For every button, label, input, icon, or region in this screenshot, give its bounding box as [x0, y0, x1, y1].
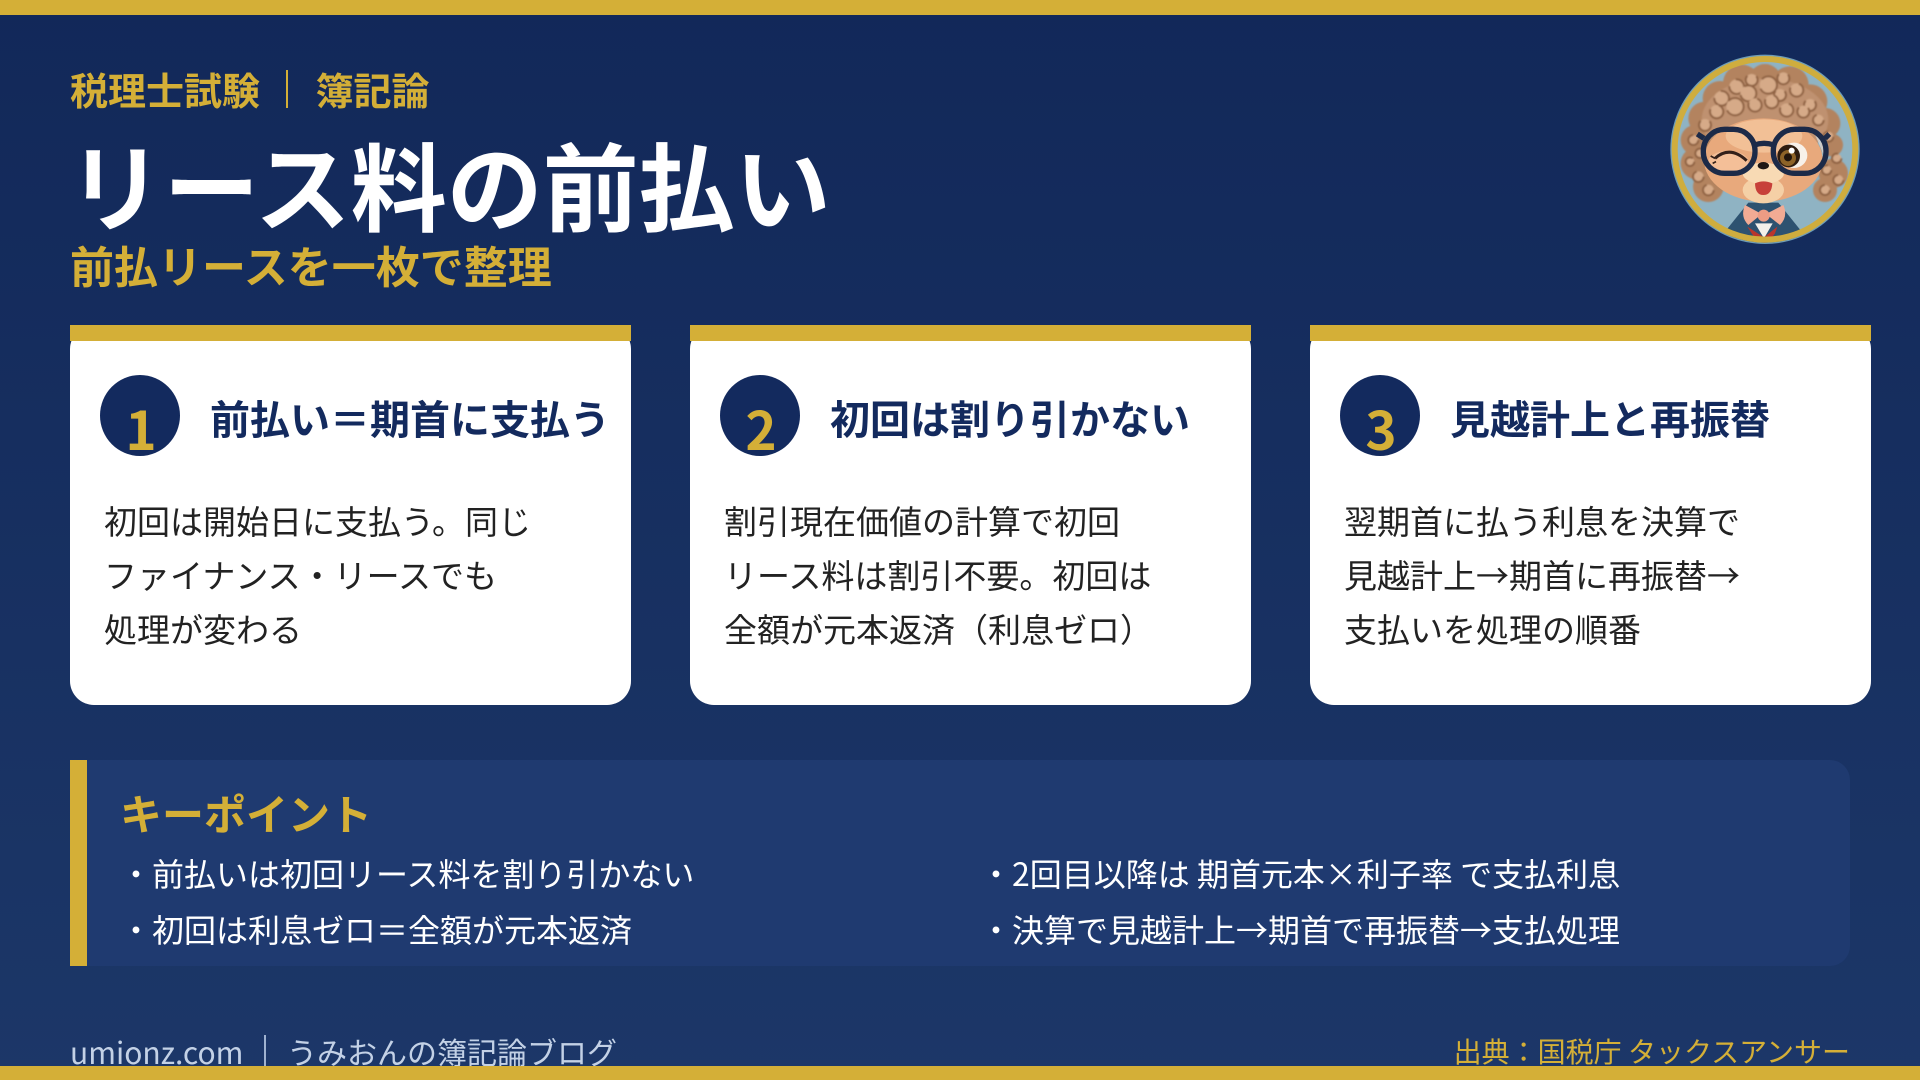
key point: right 1: ・2回目以降は 期首元本×利子率 で支払利息 [980, 850, 1620, 896]
card top accent [690, 325, 1250, 341]
top gold bar [0, 0, 1920, 15]
card body text: 割引現在価値の計算で初回 [724, 496, 1120, 544]
card body text: 見越計上→期首に再振替→ [1344, 550, 1740, 598]
bottom gold bar [0, 1066, 1920, 1080]
blog name: うみおんの簿記論ブログ [287, 1028, 617, 1072]
panel: key points [70, 760, 1850, 966]
key point: right 2: ・決算で見越計上→期首で再振替→支払処理 [980, 906, 1620, 952]
eyebrow text: subject: 簿記論 [316, 61, 430, 116]
key points accent bar [70, 760, 87, 966]
card body text: 初回は開始日に支払う。同じ [104, 496, 531, 544]
eyebrow text: exam: 税理士試験 [70, 61, 260, 116]
header eyebrow: exam and subject [70, 61, 430, 116]
card heading: 前払い＝期首に支払う [210, 388, 610, 446]
key point: left 1: ・前払いは初回リース料を割り引かない [120, 850, 694, 896]
card body text: 全額が元本返済（利息ゼロ） [724, 604, 1153, 652]
number badge 1 [100, 375, 180, 456]
number badge 2 [720, 375, 800, 456]
card body text [724, 496, 1153, 652]
subtitle: 前払リースを一枚で整理 [70, 232, 552, 296]
key point: left 2: ・初回は利息ゼロ＝全額が元本返済 [120, 906, 632, 952]
card body text [1344, 496, 1740, 652]
eyebrow divider [286, 70, 288, 108]
panel: step 3 card [1310, 325, 1870, 705]
card body text [104, 496, 531, 652]
card body text: 処理が変わる [104, 604, 302, 652]
card top accent [70, 325, 630, 341]
card body text: リース料は割引不要。初回は [724, 550, 1151, 598]
footer divider [264, 1034, 266, 1068]
card top accent [1310, 325, 1870, 341]
card body text: 翌期首に払う利息を決算で [1344, 496, 1740, 544]
card body text: ファイナンス・リースでも [104, 550, 497, 598]
number badge 2: 2 [745, 390, 777, 466]
number badge 1: 1 [125, 390, 157, 466]
site url: umionz.com [70, 1028, 243, 1072]
key points heading: キーポイント [120, 782, 372, 843]
title: リース料の前払い [68, 112, 831, 252]
footer source: 出典：国税庁 タックスアンサー [1454, 1031, 1850, 1071]
icon: poodle mascot with glasses avatar [1670, 54, 1860, 244]
card body text: 支払いを処理の順番 [1344, 604, 1641, 652]
number badge 3: 3 [1365, 390, 1397, 466]
card heading: 見越計上と再振替 [1450, 388, 1770, 446]
panel: step 2 card [690, 325, 1250, 705]
panel: step 1 card [70, 325, 630, 705]
footer site name [70, 1028, 617, 1072]
number badge 3 [1340, 375, 1420, 456]
card heading: 初回は割り引かない [830, 388, 1190, 446]
